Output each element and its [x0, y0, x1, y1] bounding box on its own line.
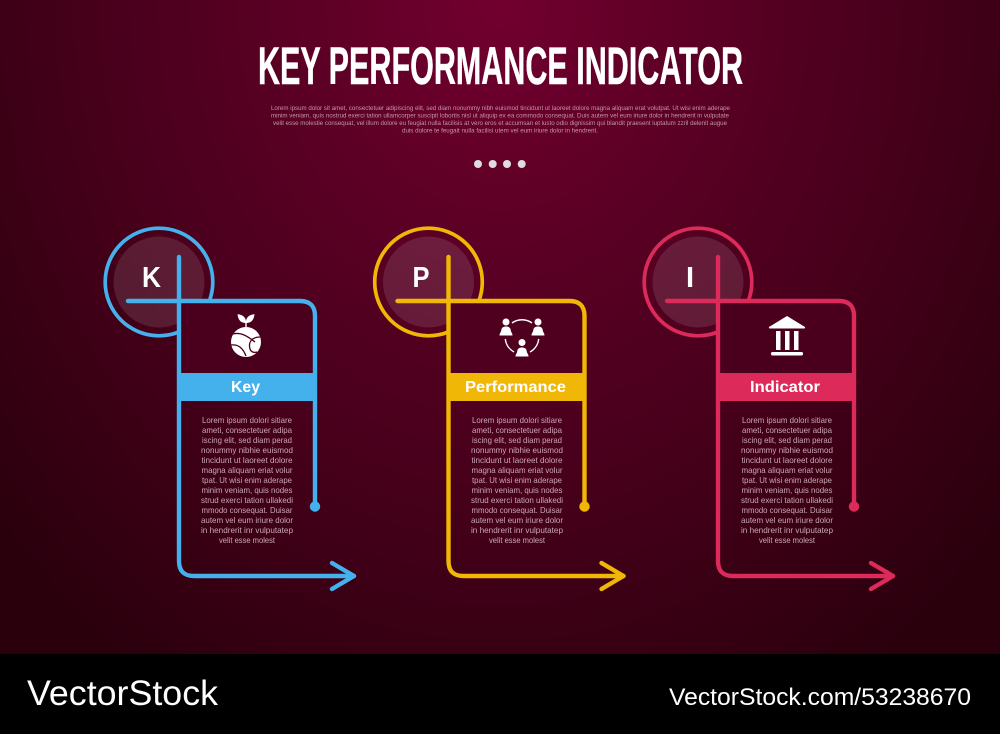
body text: minim veniam, quis nodes — [472, 485, 562, 495]
body text — [741, 415, 833, 545]
label: Indicator — [750, 379, 820, 396]
end dot — [310, 501, 320, 512]
body text: in hendrerit inr vulputatep — [471, 525, 563, 535]
pagination dots — [474, 160, 526, 168]
body text: nonummy nibhie euismod — [741, 445, 833, 455]
panel: I - Indicator — [644, 228, 893, 589]
footer bar — [0, 654, 1000, 734]
intro paragraph: Lorem ipsum dolor sit amet, consectetuer adipiscing elit, sed diam nonummy nibh euismod tincidunt ut laoreet dolore magna aliquam erat volutpat. Ut wisi enim aderape — [271, 106, 731, 112]
body text: iscing elit, sed diam perad — [202, 435, 292, 445]
body text: ameti, consectetuer adipa — [202, 425, 292, 435]
body text: ameti, consectetuer adipa — [742, 425, 832, 435]
body text: iscing elit, sed diam perad — [742, 435, 832, 445]
body text: magna aliquam eriat volur — [472, 465, 563, 475]
intro paragraph: velit esse molestie consequat, vel illum dolore eu feugiat nulla facilisis at vero eros et accumsan et iusto odio dignissim qui blandit praesent luptatum zzril delenit augue — [273, 121, 728, 127]
body text: in hendrerit inr vulputatep — [741, 525, 833, 535]
body text: autem vel eum iriure dolor — [741, 515, 833, 525]
label: Key — [231, 379, 260, 396]
body text: Lorem ipsum dolori sitiare — [202, 415, 292, 425]
icon: bank building — [769, 316, 805, 356]
body text: tpat. Ut wisi enim aderape — [742, 475, 832, 485]
body text: ameti, consectetuer adipa — [472, 425, 562, 435]
end dot — [579, 501, 590, 512]
body text: mmodo consequat. Duisar — [472, 505, 563, 515]
letter circle K — [105, 228, 213, 336]
letter circle P — [375, 228, 482, 336]
body text: velit esse molest — [489, 535, 546, 545]
body text: mmodo consequat. Duisar — [202, 505, 293, 515]
body text: tincidunt ut laoreet dolore — [202, 455, 293, 465]
body text — [201, 415, 293, 545]
end dot — [849, 501, 859, 512]
body text: autem vel eum iriure dolor — [201, 515, 293, 525]
panel: K - Key — [105, 228, 354, 589]
label band — [448, 373, 584, 401]
card outline and arrow — [667, 257, 893, 589]
body text: nonummy nibhie euismod — [201, 445, 293, 455]
card outline and arrow — [128, 257, 354, 589]
letter circle I: I — [686, 262, 694, 294]
body text: minim veniam, quis nodes — [202, 485, 292, 495]
card fill — [179, 301, 315, 401]
footer image id: VectorStock.com/53238670 — [669, 684, 971, 711]
letter circle P: P — [412, 262, 430, 294]
body text: velit esse molest — [219, 535, 276, 545]
card fill — [448, 301, 584, 401]
body text: velit esse molest — [759, 535, 816, 545]
letter circle I — [644, 228, 752, 336]
label band — [718, 373, 854, 401]
label band — [179, 373, 315, 401]
body text: minim veniam, quis nodes — [742, 485, 832, 495]
body text: autem vel eum iriure dolor — [471, 515, 563, 525]
body text: strud exerci tation ullakedi — [201, 495, 293, 505]
body text: mmodo consequat. Duisar — [742, 505, 833, 515]
panel: P - Performance — [375, 228, 624, 589]
icon: plant globe — [231, 314, 261, 357]
body text: nonummy nibhie euismod — [471, 445, 563, 455]
body text: magna aliquam eriat volur — [202, 465, 293, 475]
body text: tpat. Ut wisi enim aderape — [472, 475, 562, 485]
body text: strud exerci tation ullakedi — [741, 495, 833, 505]
body text: strud exerci tation ullakedi — [471, 495, 563, 505]
footer logo: VectorStock — [27, 674, 219, 713]
body text: magna aliquam eriat volur — [742, 465, 833, 475]
body text: tpat. Ut wisi enim aderape — [202, 475, 292, 485]
letter circle K: K — [142, 262, 161, 294]
body text — [471, 415, 563, 545]
intro paragraph: duis dolore te feugait nulla facilisi utem vel eum iriure dolor in hendrerit. — [402, 128, 598, 134]
intro paragraph — [271, 106, 731, 134]
body text: iscing elit, sed diam perad — [472, 435, 562, 445]
body text: Lorem ipsum dolori sitiare — [472, 415, 562, 425]
label: Performance — [465, 379, 566, 396]
intro paragraph: minim veniam, quis nostrud exerci tation ullamcorper suscipit lobortis nisl ut aliquip ex ea commodo consequat. Duis autem vel eum iriure dolor in hendrerit in vulputate — [271, 114, 730, 120]
body text: tincidunt ut laoreet dolore — [742, 455, 833, 465]
body text: in hendrerit inr vulputatep — [201, 525, 293, 535]
body text: tincidunt ut laoreet dolore — [472, 455, 563, 465]
icon: people in a circle — [500, 318, 544, 356]
card outline and arrow — [398, 257, 624, 589]
card fill — [718, 301, 854, 401]
body text: Lorem ipsum dolori sitiare — [742, 415, 832, 425]
